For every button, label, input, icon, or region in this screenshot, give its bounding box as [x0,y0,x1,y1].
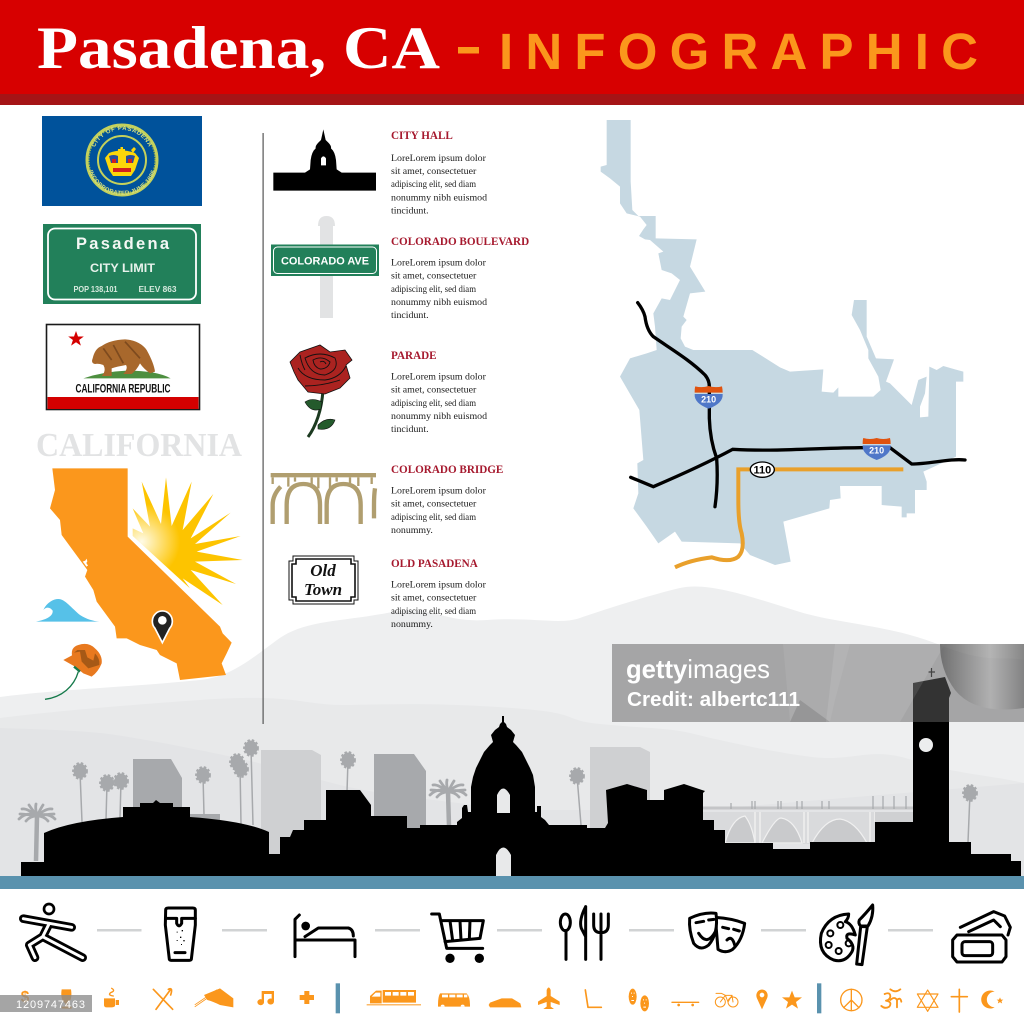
icon: shopping cart [432,914,484,963]
text block: city hall: adipiscing elit, sed diam [391,179,476,190]
icon: scooter [585,990,601,1007]
background buildings [133,747,650,860]
icon: dollar: $ [21,989,30,1006]
map: Pasadena city [601,120,965,567]
icon: Colorado Ave street sign: COLORADO AVE [281,256,369,268]
icon: train [367,990,421,1005]
text block: city hall: sit amet, consectetuer [391,166,477,177]
icon: beer [165,908,195,960]
flag: City of Pasadena: INCORPORATED JUNE 1886 [89,170,155,195]
text block: Old Pasadena: adipiscing elit, sed diam [391,606,476,617]
text block: Colorado Boulevard [391,236,529,321]
icon: crescent and star [981,990,1003,1008]
image id tag: 1209747463 [16,999,85,1011]
header subtitle: INFOGRAPHIC: INFOGRAPHIC [499,23,978,80]
text block: Colorado Bridge: LoreLorem ipsum dolor [391,486,487,496]
icon: wave [36,599,99,622]
icon: car rear [512,998,521,1007]
icon: palette and brush [820,905,873,965]
icon: star [782,991,802,1009]
divider [336,983,340,1013]
icon: bridge [271,473,376,524]
map: California state [50,468,232,680]
icon: om [881,989,901,1008]
text block: Parade: sit amet, consectetuer [391,384,477,396]
watermark text: credit: Credit: albertc111 [627,689,800,711]
highway 210 routes [631,303,965,507]
text block: city hall: CITY HALL [391,130,453,142]
icon: rose [290,345,352,437]
icon: city hall [273,129,376,191]
text block: Colorado Bridge: sit amet, consectetuer [391,498,477,510]
icon: music note [257,991,274,1005]
text block: Parade: adipiscing elit, sed diam [391,398,476,409]
icon: cross [951,989,967,1012]
text block: Parade: LoreLorem ipsum dolor [391,372,487,382]
icon: bed [295,915,355,957]
sign: Pasadena city limit: ELEV 863 [138,285,177,294]
icon: car front [489,998,512,1007]
icon: coffee cup [104,988,119,1007]
icon: hand with chopsticks [195,988,233,1007]
icon: map pin [152,611,172,643]
divider [817,983,821,1013]
sign: Pasadena city limit: CITY LIMIT [90,261,156,275]
icon: plus [300,991,314,1004]
sign: Pasadena city limit: Pasadena [76,235,170,253]
icon: poppy [45,644,102,699]
flag: City of Pasadena [42,116,202,206]
header dash [458,47,479,54]
icon: star of David [917,990,938,1011]
text block: city hall [391,130,487,216]
text block: Parade: tincidunt. [391,424,429,435]
background: mountains [0,586,1024,880]
icon: sun [133,477,243,605]
text block: city hall: LoreLorem ipsum dolor [391,153,487,164]
sign: Pasadena city limit: POP 138,101 [74,285,118,294]
skyline silhouette [21,668,1021,876]
text block: Old Pasadena: OLD PASADENA [391,558,478,570]
icon: bus [438,993,470,1007]
teal ground band [0,876,1024,889]
flag: California Republic: CALIFORNIA REPUBLIC [76,384,170,396]
shield: I-210 north: 210 [701,395,716,405]
icon: crossed fork and knife [153,989,173,1009]
icon: Old Town sign: Old [310,561,336,580]
text block: Colorado Boulevard: tincidunt. [391,310,429,321]
header banner [0,0,1024,105]
watermark: getty images [612,644,1024,722]
orange icon row 1: services [21,983,512,1013]
text block: Parade: nonummy nibh euismod [391,411,487,422]
heading: CALIFORNIA: CALIFORNIA [36,427,242,464]
icon: yoga [23,904,83,958]
text block: Colorado Bridge: adipiscing elit, sed diam [391,512,476,523]
icon: plane [538,987,560,1009]
text block: Colorado Boulevard: nonummy nibh euismod [391,297,487,308]
text block: Old Pasadena: nonummy. [391,619,433,630]
icon: bicycle [715,993,738,1007]
icon: footprints [629,989,649,1011]
text block: Parade: PARADE [391,350,437,362]
flag: City of Pasadena: CITY OF PASADENA [92,126,152,147]
text block: city hall: nonummy nibh euismod [391,192,487,204]
watermark text: gettyimages: gettyimages [626,654,770,684]
row separators [97,929,933,932]
orange icon row 2: transport and symbols [512,983,1003,1013]
flag: California Republic [46,324,200,410]
text block: Old Pasadena [391,558,487,630]
icon: peace [841,989,862,1011]
shield: I-210 east: 210 [869,446,884,456]
highway 110 route [675,469,903,567]
image id tag [0,995,92,1012]
text block: Colorado Boulevard: LoreLorem ipsum dolor [391,258,487,268]
icon: skateboard [672,1002,699,1006]
text block: Old Pasadena: LoreLorem ipsum dolor [391,580,487,590]
header title: Pasadena, CA: Pasadena, CA [37,15,440,81]
text block: Colorado Boulevard: COLORADO BOULEVARD [391,236,529,248]
text block: Colorado Bridge: COLORADO BRIDGE [391,464,503,476]
icon: Old Town sign: Town [304,580,342,599]
shield: 110: 110 [753,465,771,477]
text block: Colorado Bridge: nonummy. [391,525,433,536]
palm trees [19,740,977,861]
sign: Pasadena city limit [43,224,201,304]
text block: Colorado Boulevard: sit amet, consectetuer [391,270,477,282]
icon: utensils [560,907,608,959]
icon: theatre masks [689,913,745,952]
text block: Old Pasadena: sit amet, consectetuer [391,592,477,604]
text block: Colorado Boulevard: adipiscing elit, sed diam [391,284,476,295]
icon: Colorado Ave street sign [271,216,379,318]
icon: Old Town sign [289,556,358,604]
Colorado bridge silhouette [703,796,913,844]
shield: I-210 east [863,438,891,460]
text block: Colorado Bridge [391,464,503,536]
text block: city hall: tincidunt. [391,206,429,216]
icon: location pin [756,990,768,1009]
shield: 110 [750,462,774,477]
icon: wine glass [61,989,72,1009]
icon: tickets [953,912,1010,962]
shield: I-210 north [695,386,723,409]
divider line [262,133,264,724]
text block: Parade [391,350,487,435]
